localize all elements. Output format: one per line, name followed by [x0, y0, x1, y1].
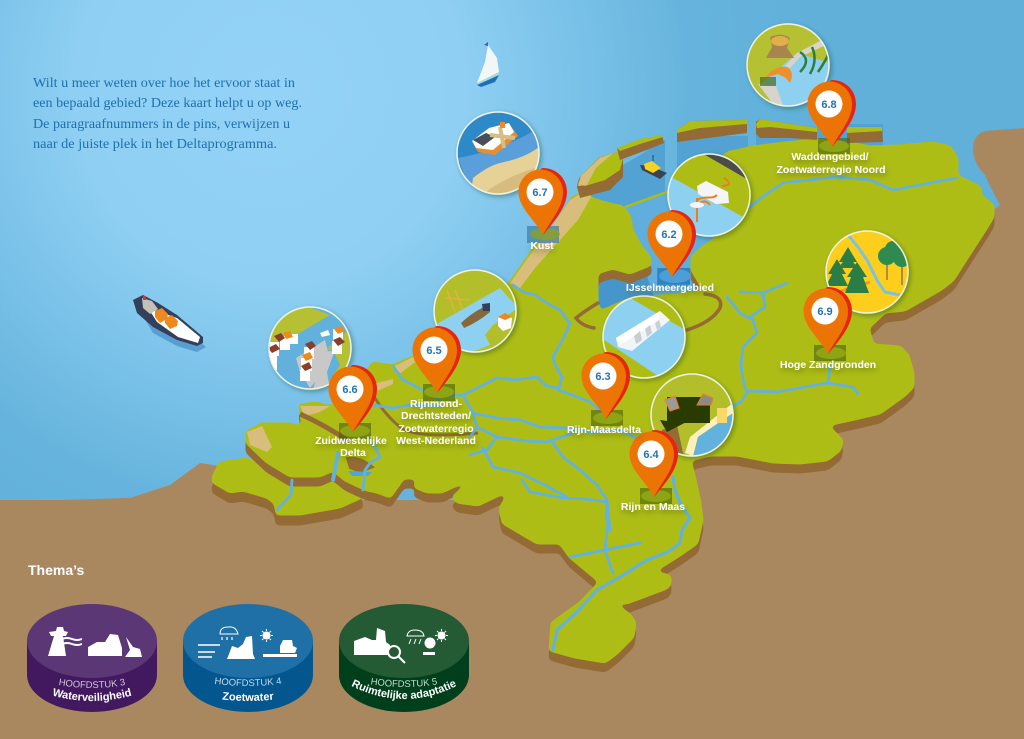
rivers — [277, 177, 957, 650]
pin 6.9: 6.9 — [817, 306, 833, 318]
label: Waddengebied: Zoetwaterregio Noord — [776, 164, 886, 176]
disk: Waterveiligheid — [27, 604, 157, 712]
pin 6.2: 6.2 — [661, 229, 677, 241]
intro text — [33, 76, 302, 152]
disk: Waterveiligheid: HOOFDSTUK 3 — [59, 678, 125, 688]
pin 6.2 — [648, 210, 696, 284]
Wadden islands — [577, 119, 883, 198]
disk: Zoetwater: HOOFDSTUK 4 — [215, 677, 282, 686]
pin 6.8 — [808, 80, 856, 154]
pin 6.3: 6.3 — [595, 371, 611, 383]
inset circle: Rijnmond — [432, 268, 518, 354]
intro text: Wilt u meer weten over hoe het ervoor staat in — [33, 76, 295, 91]
wadden shallows — [590, 124, 883, 208]
coast dunes and inner banks — [247, 191, 721, 476]
label: Rijnmond: Drechtsteden/ — [401, 410, 471, 422]
intro text: naar de juiste plek in het Deltaprogramma. — [33, 137, 277, 152]
inset circle: Hoge Zandgronden — [824, 229, 911, 315]
label: Hoge Zandgronden: Hoge Zandgronden — [780, 359, 876, 371]
legend heading: Thema’s — [28, 562, 84, 578]
inset circle: IJsselmeergebied — [665, 150, 755, 240]
mainland Netherlands — [247, 140, 993, 671]
disk: Ruimtelijke adaptatie — [339, 604, 469, 712]
label: Zuidwestelijke Delta: Delta — [340, 447, 366, 459]
intro text: De paragraafnummers in de pins, verwijzen u — [33, 117, 290, 132]
pin 6.4: 6.4 — [643, 449, 660, 461]
sailboat — [477, 42, 499, 87]
label: Zuidwestelijke Delta: Zuidwestelijke — [315, 435, 387, 447]
icon: lighthouse, dike and plant — [48, 627, 142, 657]
pin 6.5: 6.5 — [426, 345, 442, 357]
icon: rain, factory, sun and tractor — [198, 627, 297, 659]
label: Kust: Kust — [530, 240, 554, 252]
inset circle: Rijn en Maas — [649, 372, 735, 458]
IJsselmeer — [590, 192, 720, 315]
pin 6.3 — [582, 352, 630, 426]
dredging boat — [640, 155, 667, 179]
disk: Waterveiligheid: Waterveiligheid — [54, 688, 132, 703]
disk: Zoetwater: Zoetwater — [222, 692, 274, 701]
label: Rijnmond: Rijnmond- — [410, 398, 462, 410]
label: Rijnmond: Zoetwaterregio — [398, 423, 474, 435]
disk: Zoetwater — [183, 604, 313, 712]
inset circle: Zuidwestelijke Delta — [267, 300, 355, 392]
pin 6.6 — [328, 365, 377, 439]
pin 6.8: 6.8 — [821, 99, 837, 111]
pin 6.9 — [804, 287, 852, 361]
label: Rijn-Maasdelta: Rijn-Maasdelta — [567, 424, 641, 436]
pin 6.4 — [630, 430, 678, 504]
label: Rijnmond: West-Nederland — [396, 435, 476, 447]
Zeeuws-Vlaanderen — [213, 459, 362, 524]
label: Rijn en Maas: Rijn en Maas — [621, 501, 685, 513]
intro text: een bepaald gebied? Deze kaart helpt u op weg. — [33, 96, 302, 111]
pin 6.6: 6.6 — [342, 384, 358, 396]
region labels — [315, 151, 886, 513]
inset circle: Rijn-Maasdelta — [600, 290, 687, 380]
disk: Ruimtelijke adaptatie: Ruimtelijke adaptatie — [352, 679, 456, 701]
pin 6.5 — [412, 326, 461, 401]
container ship — [133, 295, 206, 352]
pin 6.7: 6.7 — [532, 187, 548, 199]
inset circle: Kust — [455, 110, 545, 200]
pin 6.7 — [518, 168, 567, 243]
label: IJsselmeergebied: IJsselmeergebied — [626, 282, 714, 294]
disk: Ruimtelijke adaptatie: HOOFDSTUK 5 — [371, 678, 437, 687]
inset circle: Waddengebied — [745, 20, 835, 110]
icon: city, magnifier, rain, tree and sun — [354, 628, 448, 663]
label: Waddengebied: Waddengebied/ — [791, 151, 869, 163]
